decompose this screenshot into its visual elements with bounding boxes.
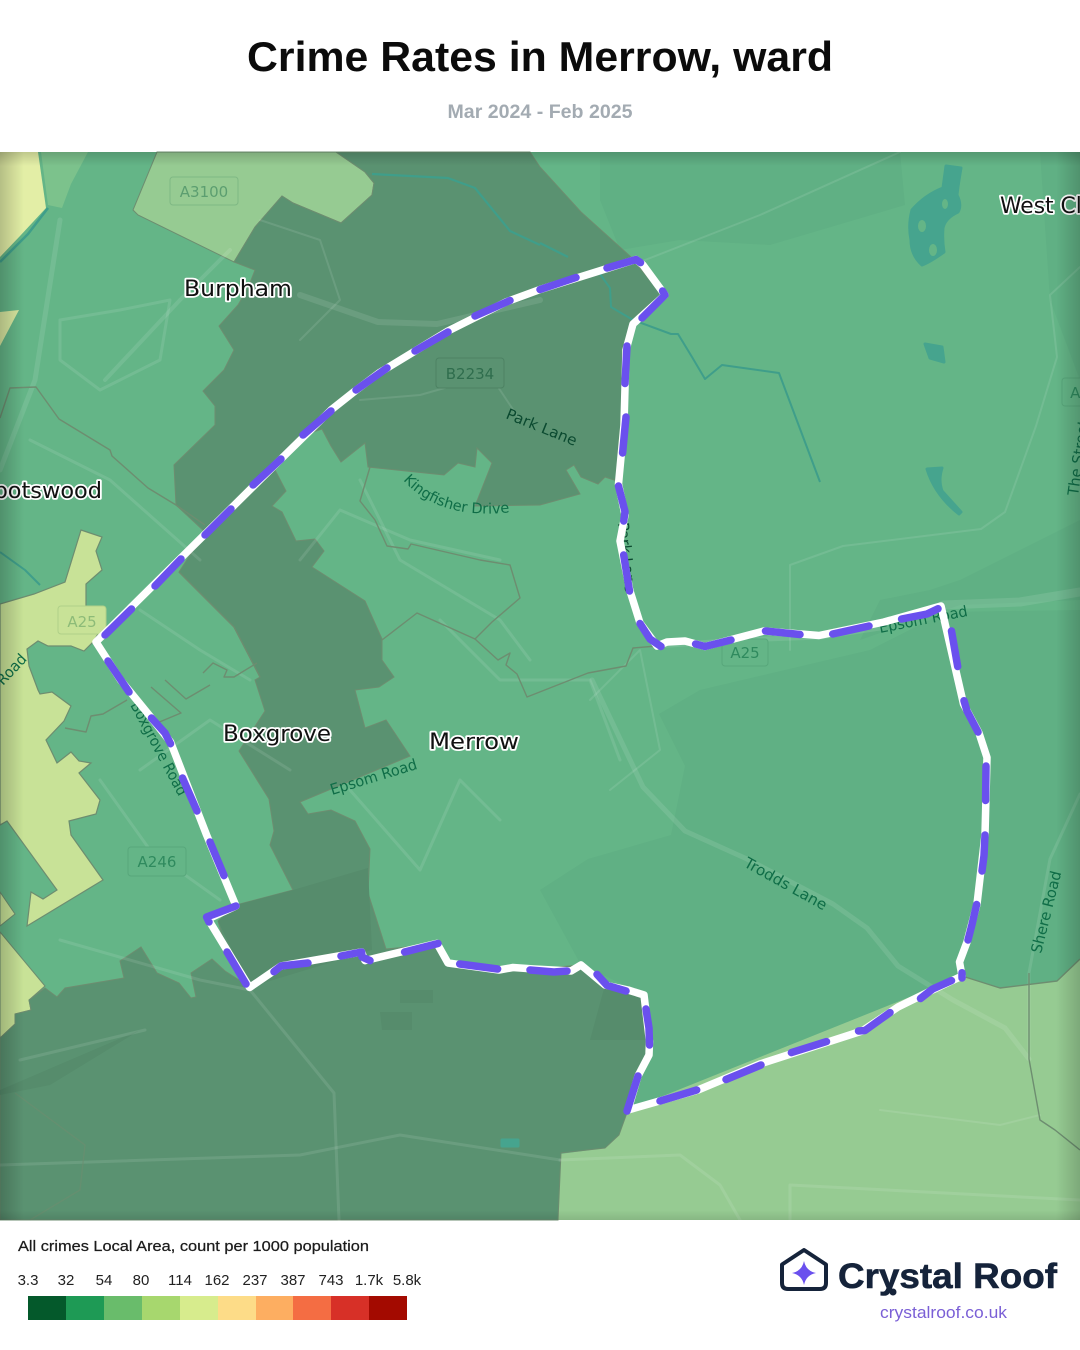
small yellow sliver xyxy=(0,310,19,346)
slightly darker woodland patches xyxy=(540,152,1080,1110)
light green area north: A3100 xyxy=(133,152,374,262)
road name: Boxgrove Road: Boxgrove Road xyxy=(126,698,191,799)
map edge shading xyxy=(0,152,1080,1220)
lake islands xyxy=(918,199,948,256)
shield A246: A246 xyxy=(138,853,176,871)
choropleth map xyxy=(0,152,1080,1220)
brand logo xyxy=(782,1250,1057,1322)
minor roads xyxy=(0,152,1080,1220)
subtitle: date range: Mar 2024 - Feb 2025 xyxy=(448,102,633,123)
shield A3100 xyxy=(170,177,238,205)
place names xyxy=(0,194,1080,755)
legend colour bar xyxy=(28,1296,407,1320)
legend tick labels: 32 xyxy=(58,1272,74,1289)
lower-left yellow slivers xyxy=(0,892,45,1038)
darker patches inside dark area xyxy=(0,868,648,1095)
legend tick labels: 387 xyxy=(280,1272,306,1289)
shield A25 west xyxy=(58,606,106,634)
map base: medium green area xyxy=(0,152,1080,1220)
road name: Park Lane vertical: Park Lane xyxy=(614,522,639,593)
legend tick labels: 743 xyxy=(318,1272,344,1289)
top-left pale green sliver xyxy=(41,152,88,208)
legend tick labels: 237 xyxy=(242,1272,268,1289)
ward boundary: purple dashes xyxy=(105,260,986,1111)
shield right edge xyxy=(1062,378,1080,406)
legend tick labels: 114 xyxy=(168,1272,192,1289)
legend tick labels: 5.8k xyxy=(393,1272,422,1289)
dark green high-density band and south area xyxy=(0,152,662,1220)
road number shields xyxy=(58,177,1080,876)
legend tick labels: 3.3 xyxy=(18,1272,38,1289)
place: Merrow: Merrow xyxy=(429,730,519,755)
title: Crime Rates in Merrow, ward xyxy=(247,33,833,80)
water: lakes xyxy=(502,166,961,1146)
large yellow-green area west xyxy=(0,530,105,926)
water: rivers xyxy=(0,174,820,585)
shield A3100: A3100 xyxy=(180,183,228,201)
place: Burpham: Burpham xyxy=(184,277,292,302)
legend tick labels: 1.7k xyxy=(355,1272,384,1289)
road name: Trodds Lane: Trodds Lane xyxy=(740,853,830,914)
road name: Kingfisher Drive: Kingfisher Drive xyxy=(404,474,508,514)
road name: Park Lane: Park Lane xyxy=(504,405,580,450)
legend tick labels: 54 xyxy=(96,1272,112,1289)
road name: Shere Road: Shere Road xyxy=(1027,869,1065,955)
icon: house with star xyxy=(782,1250,826,1289)
place: Boxgrove: Boxgrove xyxy=(223,722,331,747)
shield A246 xyxy=(128,847,186,876)
legend tick labels xyxy=(18,1272,422,1289)
shield A25 west: A25 xyxy=(67,613,97,631)
shield A25 east: A25 xyxy=(730,644,760,662)
shield B2234: B2234 xyxy=(446,365,494,383)
legend xyxy=(18,1238,422,1320)
ward borders xyxy=(0,387,1080,1220)
ward boundary: white line xyxy=(96,260,987,1110)
legend tick labels: 162 xyxy=(204,1272,230,1289)
shield A25 east xyxy=(722,639,768,666)
road name: Epsom Road west: Epsom Road xyxy=(328,755,419,799)
road names xyxy=(0,372,1080,955)
light green area south east xyxy=(558,959,1080,1220)
shield B2234 xyxy=(436,358,504,388)
legend title: All crimes Local Area, count per 1000 population xyxy=(18,1238,369,1255)
legend tick labels: 80 xyxy=(133,1272,149,1289)
brand url: crystalroof.co.uk xyxy=(880,1304,1008,1322)
road name: Epsom Road east: Epsom Road xyxy=(877,602,969,637)
top-left yellow area xyxy=(0,152,46,257)
brand name: Crystal Roof xyxy=(838,1257,1057,1296)
